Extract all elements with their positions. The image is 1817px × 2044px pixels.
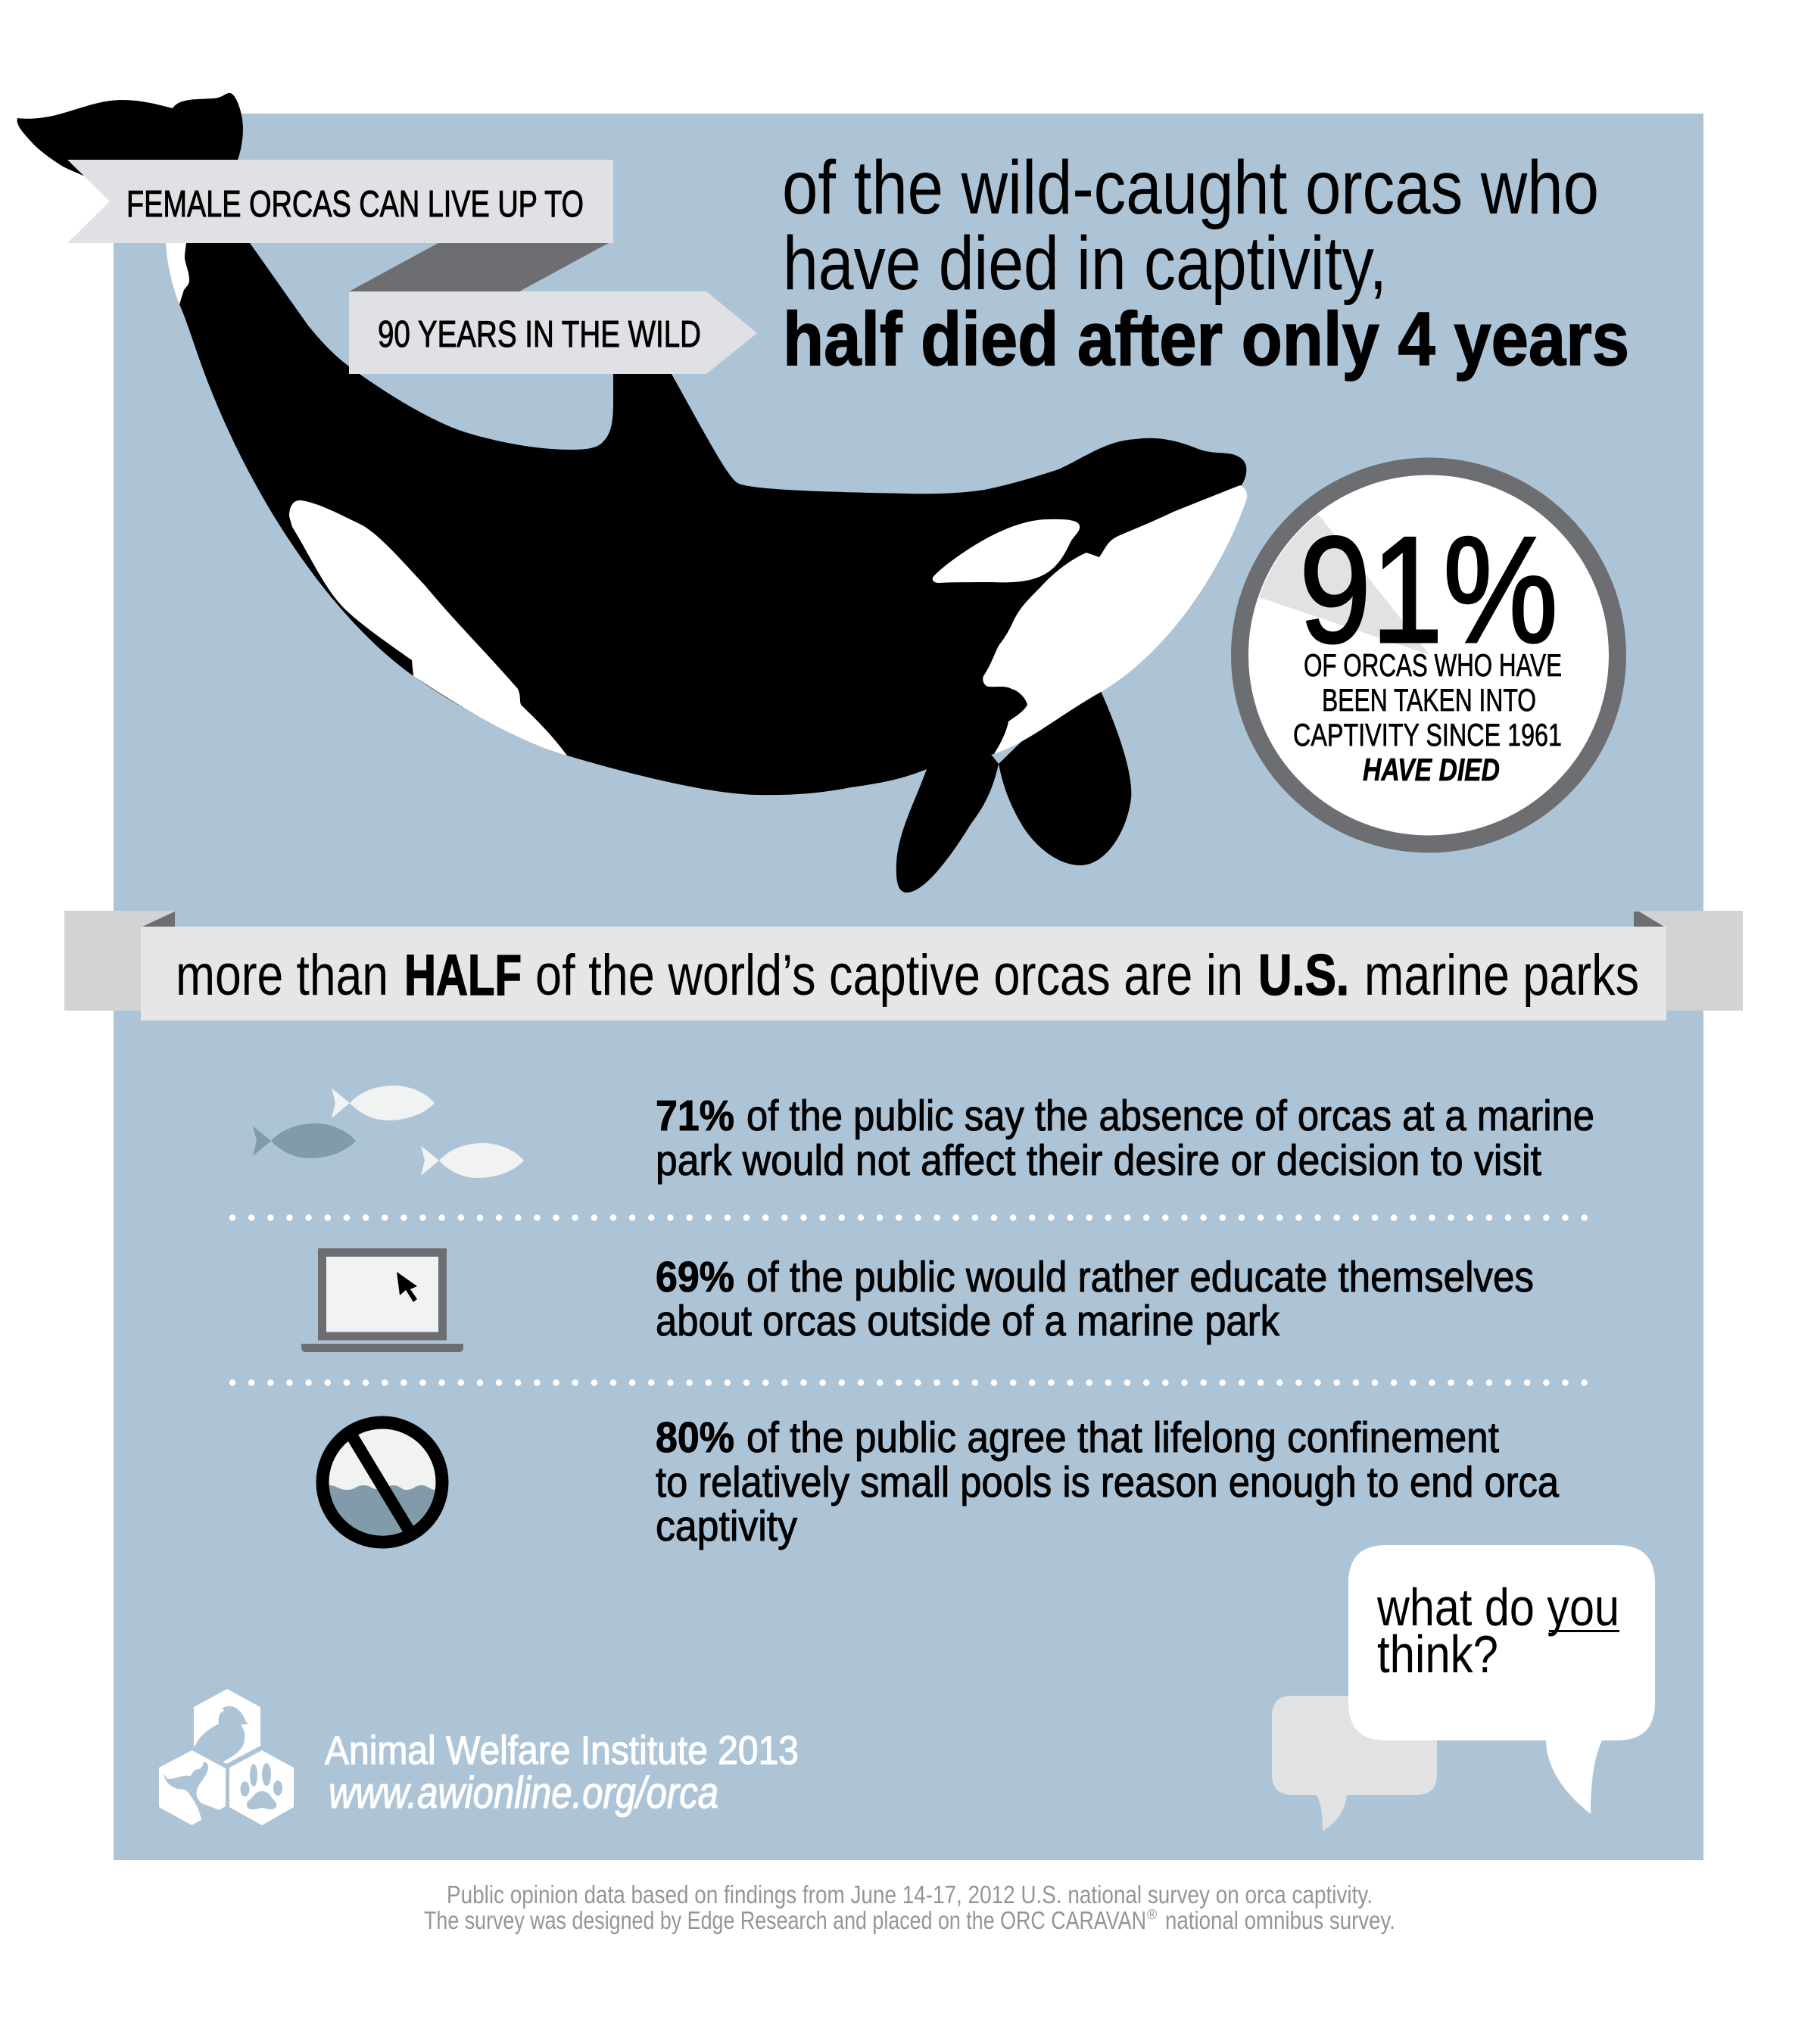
illustration: orca whale <box>17 93 1247 893</box>
headline line 3: half died after only 4 years <box>783 297 1629 382</box>
fish left <box>253 1123 356 1158</box>
bubble text: what do you <box>1376 1578 1619 1637</box>
pie wedge <box>1259 514 1429 655</box>
stat: 71 percent: 71% <box>656 1092 734 1140</box>
ribbon left tail <box>64 911 175 1011</box>
whale right flipper <box>999 691 1131 865</box>
fish top <box>332 1086 435 1120</box>
icon: three fish <box>253 1086 524 1178</box>
underline <box>1549 1630 1619 1632</box>
logo left hexagon with whale tail <box>159 1750 226 1828</box>
logo url: www.awionline.org/orca <box>329 1768 718 1818</box>
ribbon text: U.S. <box>1258 943 1349 1008</box>
banner: 90 years in the wild <box>349 291 757 374</box>
cursor arrow <box>397 1272 417 1302</box>
icon: no pools sign <box>323 1422 442 1542</box>
panel: blue background <box>114 114 1703 1860</box>
callout: 91 percent circle <box>1240 466 1617 844</box>
stat: 80 percent: of the public agree that lifelong confinement <box>746 1413 1499 1462</box>
laptop screen <box>323 1252 442 1336</box>
ribbon text <box>176 943 1639 1008</box>
ribbon: more than half of captive orcas <box>64 911 1743 1020</box>
stat: 69 percent: about orcas outside of a marine park <box>656 1297 1279 1345</box>
logo: Animal Welfare Institute <box>159 1689 799 1828</box>
callout text: CAPTIVITY SINCE 1961 <box>1293 717 1562 752</box>
logo name: Animal Welfare Institute 2013 <box>325 1728 799 1773</box>
fish right <box>421 1143 524 1178</box>
laptop base <box>301 1344 463 1352</box>
ribbon text: of the world’s captive orcas are in <box>535 943 1243 1008</box>
ribbon right fold <box>1634 911 1664 927</box>
headline line 2: have died in captivity, <box>783 221 1387 306</box>
sign slash <box>352 1436 410 1531</box>
whale white tail stripe <box>166 235 189 304</box>
big number: 91% <box>1299 506 1558 675</box>
small grey bubble <box>1272 1696 1437 1831</box>
whale left flipper <box>896 746 999 893</box>
stat: 69 percent: of the public would rather educate themselves <box>746 1253 1534 1301</box>
water <box>329 1485 435 1535</box>
ribbon fold shadow <box>349 243 609 291</box>
stat: 69 percent: 69% <box>656 1253 734 1301</box>
whale body <box>17 93 1246 795</box>
ribbon text: HALF <box>404 943 522 1008</box>
stat: 80 percent <box>656 1413 1559 1550</box>
footnote: ® <box>1147 1907 1157 1922</box>
whale white saddle patch <box>289 500 567 756</box>
stat: 80 percent: to relatively small pools is reason enough to end orca <box>656 1458 1559 1507</box>
banner text top: FEMALE ORCAS CAN LIVE UP TO <box>126 184 584 225</box>
footnote: national omnibus survey. <box>1165 1906 1395 1934</box>
footnote <box>424 1880 1395 1934</box>
stat: 71 percent: of the public say the absence of orcas at a marine <box>746 1092 1594 1140</box>
ribbon text: more than <box>176 943 388 1008</box>
sign background <box>329 1429 436 1536</box>
ribbon text: marine parks <box>1364 943 1639 1008</box>
icon: speech bubbles <box>1272 1545 1655 1831</box>
logo right hexagon with paw <box>229 1750 294 1825</box>
stat: 80 percent: 80% <box>656 1413 734 1462</box>
logo top hexagon with bird <box>194 1689 260 1775</box>
ribbon body <box>141 927 1666 1020</box>
ribbon right tail <box>1634 911 1743 1011</box>
bubble text <box>1376 1578 1619 1684</box>
circle ring <box>1240 466 1617 844</box>
headline line 1: of the wild-caught orcas who <box>782 145 1599 230</box>
large white bubble <box>1348 1545 1655 1814</box>
callout text: OF ORCAS WHO HAVE <box>1304 647 1562 683</box>
banner text bottom: 90 YEARS IN THE WILD <box>378 314 701 355</box>
callout text: HAVE DIED <box>1363 752 1500 787</box>
stat: 71 percent <box>656 1092 1594 1185</box>
callout text <box>1293 647 1562 787</box>
banner: female orcas can live up to <box>67 160 613 243</box>
callout text: BEEN TAKEN INTO <box>1322 682 1536 718</box>
bubble text: think? <box>1377 1625 1498 1684</box>
whale white eye patch <box>933 519 1080 583</box>
stat: 80 percent: captivity <box>656 1502 797 1550</box>
ribbon left fold <box>142 911 175 927</box>
footnote: Public opinion data based on findings from June 14-17, 2012 U.S. national survey on orca captivity. <box>447 1880 1373 1908</box>
stat: 71 percent: park would not affect their desire or decision to visit <box>656 1136 1541 1185</box>
footnote: The survey was designed by Edge Research and placed on the ORC CARAVAN <box>424 1906 1146 1934</box>
icon: laptop with cursor <box>301 1252 463 1352</box>
sign ring <box>323 1422 442 1542</box>
headline <box>782 145 1629 382</box>
stat: 69 percent <box>656 1253 1534 1345</box>
whale white jaw and belly <box>983 485 1247 754</box>
